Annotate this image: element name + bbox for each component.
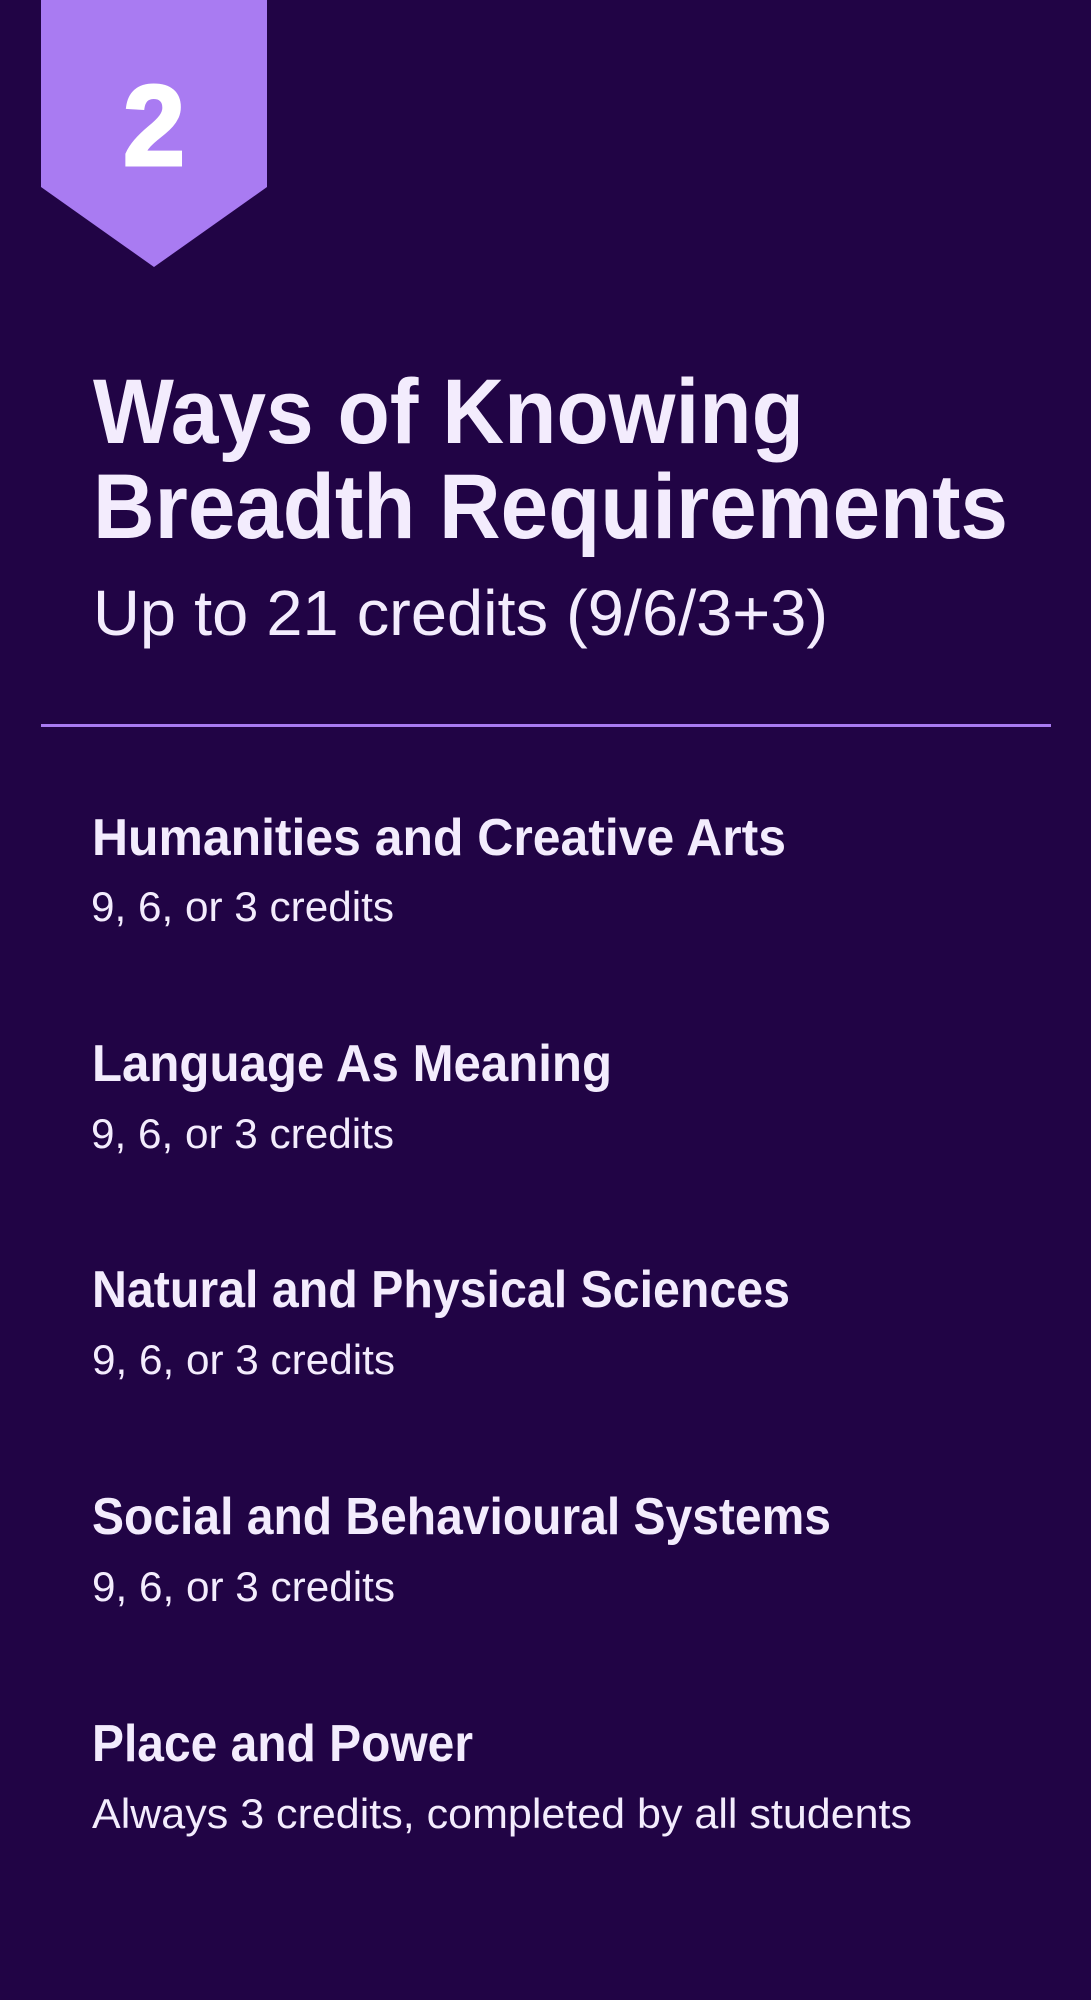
title: Ways of Knowing xyxy=(93,361,804,463)
category: Language As Meaning: Language As Meaning xyxy=(92,1035,612,1093)
category: Place and Power xyxy=(92,1715,912,1837)
category: Social and Behavioural Systems: 9, 6, or 3 credits xyxy=(92,1563,395,1610)
category: Natural and Physical Sciences: Natural and Physical Sciences xyxy=(92,1261,790,1319)
subtitle: Up to 21 credits (9/6/3+3) xyxy=(93,577,828,649)
number banner xyxy=(41,0,267,267)
category: Place and Power: Place and Power xyxy=(92,1715,473,1773)
category: Natural and Physical Sciences xyxy=(92,1261,790,1383)
category: Natural and Physical Sciences: 9, 6, or 3 credits xyxy=(92,1336,395,1383)
category: Humanities and Creative Arts xyxy=(91,809,786,930)
category: Humanities and Creative Arts: 9, 6, or 3 credits xyxy=(91,883,394,930)
number banner: 2 xyxy=(123,63,185,190)
title xyxy=(93,361,1008,558)
category: Language As Meaning xyxy=(91,1035,612,1157)
category: Language As Meaning: 9, 6, or 3 credits xyxy=(91,1110,394,1157)
category: Social and Behavioural Systems xyxy=(92,1488,831,1610)
category: Social and Behavioural Systems: Social and Behavioural Systems xyxy=(92,1488,831,1546)
category: Place and Power: Always 3 credits, completed by all students xyxy=(92,1790,912,1837)
category: Humanities and Creative Arts: Humanities and Creative Arts xyxy=(92,809,786,867)
title: Breadth Requirements xyxy=(93,456,1008,558)
